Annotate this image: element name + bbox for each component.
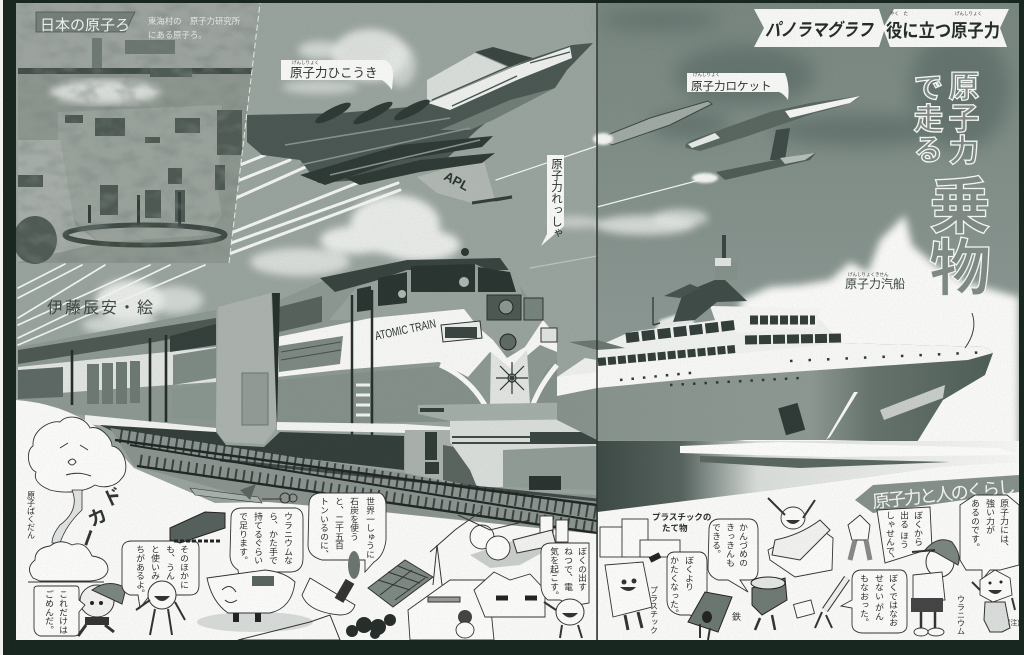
plastic buildings bbox=[600, 519, 680, 557]
hull bbox=[557, 343, 993, 442]
right page edge bbox=[1019, 0, 1024, 655]
bubble: ぼくよりかたくなった: かたくなった。 bbox=[669, 556, 679, 618]
bubble: これだけはごめんだ: これだけは bbox=[58, 590, 68, 634]
bubble: かんづめの: できる。 bbox=[711, 523, 721, 558]
bubble: ぼくの出す: ぼくの出す bbox=[577, 547, 587, 591]
title: 原子力で走る乗物: で走る bbox=[908, 72, 944, 165]
uranium character bbox=[972, 570, 1015, 632]
small plane and train icons bbox=[170, 484, 297, 543]
label: プラスチック: プラスチック bbox=[650, 586, 658, 634]
bubble: これだけはごめんだ bbox=[34, 586, 85, 636]
bubble: 原子力には: 強い力が bbox=[985, 498, 995, 534]
airplane: nuclear plane bbox=[247, 43, 593, 203]
photo title box: 日本の原子ろ: 日本の原子ろ bbox=[40, 17, 130, 34]
bubble: ぼくではなおせない: もなおった。 bbox=[859, 574, 869, 627]
grid-roof building bbox=[368, 560, 433, 607]
bubble: 原子力には: あるのです。 bbox=[970, 499, 980, 552]
bubble: 世界一しゅうに: 世界一しゅうに bbox=[365, 496, 375, 559]
boy in cap running bbox=[78, 583, 126, 636]
atom star emblem bbox=[496, 362, 528, 394]
undercarriage bbox=[100, 425, 404, 470]
right page dark cloud smudges bbox=[600, 10, 1010, 150]
panel: right comic strip white ground bbox=[598, 462, 1019, 640]
rockets: three nuclear rockets bbox=[593, 96, 860, 183]
bubble: そのほかにも: も、うん bbox=[165, 545, 175, 580]
bubble: そのほかにも bbox=[122, 541, 199, 608]
label: 原子力ロケット: げんしりょく bbox=[693, 71, 720, 78]
panel: left page sky bbox=[16, 3, 597, 640]
bulb character right of left page bbox=[544, 599, 584, 638]
man in bed character bbox=[768, 498, 833, 577]
coal pile bbox=[346, 614, 396, 639]
bubble: ぼくではなおせない bbox=[841, 570, 907, 633]
uranium-ship character bbox=[197, 570, 313, 632]
photo panel: Japanese reactor at Tokai-mura bbox=[13, 3, 260, 264]
contrails: white speed lines bbox=[18, 146, 700, 345]
label: 原子力ひこうき: げんしりょく bbox=[292, 59, 319, 66]
bubble: 世界一しゅうに: 石炭を使う bbox=[349, 497, 359, 541]
panel: left comic strip white ground bbox=[16, 400, 597, 640]
airplane tail lettering: APL bbox=[442, 168, 472, 194]
bubble: ウラニウムなら: 持てるぐらい bbox=[253, 511, 263, 565]
railway tracks bbox=[110, 428, 597, 535]
light wing bbox=[427, 53, 507, 102]
bubble: そのほかにも: ちがあるよ。 bbox=[135, 545, 145, 598]
title banner: panorama graph: げんしりょく bbox=[955, 10, 982, 17]
bubble: そのほかにも: と使いみ bbox=[150, 545, 160, 580]
bubble: かんづめの bbox=[708, 519, 758, 592]
left scan border bbox=[3, 0, 16, 655]
locomotive body bbox=[279, 260, 557, 424]
sound effect: ドカーン: ー bbox=[77, 526, 103, 551]
bubble: ぼくよりかたくなった bbox=[667, 552, 707, 622]
boy in helmet bbox=[911, 540, 959, 636]
bubble: ぼくの出す: 気を起こす。 bbox=[549, 546, 559, 600]
bubble: 世界一しゅうに: と、二千五百 bbox=[334, 497, 344, 551]
label: 原子力れっしゃ: 原子力れっしゃ bbox=[550, 158, 563, 238]
label: 原子力ロケット: 原子力ロケット bbox=[691, 80, 772, 93]
title: 原子力で走る乗物: 乗 bbox=[929, 173, 991, 242]
power plant and towers bbox=[430, 512, 568, 585]
label: 原子力汽船: 原子力汽船 bbox=[845, 276, 905, 291]
title: 原子力で走る乗物 bbox=[908, 70, 991, 304]
upper deck bbox=[710, 306, 820, 333]
train: atomic train bbox=[18, 248, 597, 490]
photo caption: 東海村の 原子力研究所 bbox=[148, 16, 241, 26]
photo caption: にある原子ろ。 bbox=[148, 30, 207, 40]
bubble: ウラニウムなら: ウラニウムな bbox=[283, 512, 293, 565]
title banner: panorama graph bbox=[754, 9, 1009, 47]
label: プラスチックのたて物: プラスチックの bbox=[652, 512, 711, 522]
plastic book character bbox=[605, 555, 660, 630]
title banner: panorama graph: 役に立つ原子力 bbox=[886, 21, 1000, 41]
title: 原子力で走る乗物: 物 bbox=[929, 235, 991, 304]
bubble: ぼくから: しゃせんで、 bbox=[885, 511, 895, 564]
title: 原子力で走る乗物: 原子力 bbox=[944, 70, 979, 166]
bubble: ぼくから bbox=[877, 507, 932, 564]
bubble: 世界一しゅうに: トンいるのに、 bbox=[319, 497, 329, 559]
bubble: ウラニウムなら bbox=[230, 508, 303, 585]
title banner: panorama graph: やく た bbox=[890, 10, 908, 17]
bubble: ぼくよりかたくなった: ぼくより bbox=[684, 556, 694, 591]
bubble: 世界一しゅうに bbox=[308, 493, 386, 572]
gangway panel bbox=[216, 293, 280, 444]
bubble: かんづめの: かんづめの bbox=[738, 523, 748, 567]
engine pods bbox=[300, 96, 495, 185]
rear coach bbox=[18, 310, 216, 436]
large white cloud behind ship bbox=[650, 215, 1019, 470]
white scan margin bbox=[0, 0, 3, 655]
sound effect: ドカーン: ド bbox=[100, 485, 126, 512]
rock character bbox=[848, 515, 870, 560]
bubble: ウラニウムなら: で足ります。 bbox=[238, 512, 248, 565]
sound effect: ドカーン: カ bbox=[85, 505, 111, 532]
title banner: panorama graph: パノラマグラフ bbox=[765, 20, 874, 40]
tail bbox=[417, 158, 495, 203]
water under ship bbox=[597, 441, 1019, 512]
uranium bulb character bbox=[136, 581, 185, 635]
coal-ship character bbox=[238, 551, 360, 640]
label: 原子力ひこうき: 原子力ひこうき bbox=[290, 66, 378, 80]
funnel and mast bbox=[673, 279, 747, 322]
bubble: 原子力には: 原子力には、 bbox=[999, 499, 1009, 552]
bubble: ぼくの出す bbox=[541, 543, 589, 606]
banner: 原子力と人のくらし: 原子力と人のくらし bbox=[871, 477, 1017, 512]
photo caption bbox=[148, 16, 241, 40]
label: プラスチックのたて物 bbox=[652, 512, 711, 533]
bubble: ぼくから: 出る ほう bbox=[899, 510, 909, 549]
page fold line bbox=[596, 3, 598, 640]
lower deck bbox=[596, 317, 843, 366]
syringe and suitcase bbox=[793, 578, 847, 628]
locomotive door ladder bbox=[352, 290, 372, 440]
bubble: ぼくの出す: ねつで、電 bbox=[563, 547, 573, 591]
ship: nuclear liner bbox=[557, 235, 993, 442]
train lettering: ATOMIC TRAIN bbox=[374, 316, 437, 343]
clouds: sky clouds on both pages bbox=[82, 29, 708, 335]
bubble: 原子力には bbox=[960, 495, 1019, 580]
windows bbox=[598, 320, 843, 362]
bubble: ぼくではなおせない: せない がん bbox=[874, 574, 884, 620]
bubble: ウラニウムなら: ら、かた手で bbox=[268, 512, 278, 565]
bubble: かんづめの: きっきんも bbox=[725, 523, 735, 567]
locomotive nose skirt bbox=[405, 402, 597, 490]
label: 原子力ひこうき bbox=[281, 59, 393, 90]
label: 原子ばくだん: 原子ばくだん bbox=[26, 491, 36, 539]
iron book character bbox=[688, 592, 732, 640]
fuselage bbox=[247, 43, 593, 183]
note mark: (注) bbox=[1008, 618, 1020, 627]
sound effect: ドカーン bbox=[77, 485, 126, 551]
headlight and grille bbox=[441, 321, 482, 342]
mushroom cloud character bbox=[28, 417, 126, 582]
houses with ceiling lights bbox=[408, 572, 545, 640]
can character bbox=[751, 577, 787, 630]
label: 鉄: 鉄 bbox=[732, 611, 741, 622]
bottom scan border bbox=[0, 640, 1024, 655]
white sill line bbox=[277, 422, 452, 434]
label: 原子力ロケット bbox=[687, 71, 789, 100]
bubble: これだけはごめんだ: ごめんだ。 bbox=[44, 589, 54, 634]
credit: artist name: 伊藤辰安・絵 bbox=[47, 299, 155, 317]
label: 原子力汽船: げんしりょくきせん bbox=[848, 271, 889, 278]
bubble: ぼくから: ぼくから bbox=[913, 511, 923, 546]
bubble: そのほかにも: そのほかに bbox=[179, 545, 189, 589]
rocket flames bbox=[593, 133, 718, 183]
label: 原子力れっしゃ bbox=[541, 155, 564, 246]
label: プラスチックのたて物: たて物 bbox=[662, 523, 688, 533]
top scan border bbox=[0, 0, 1024, 3]
panel: right page sky bbox=[597, 3, 1019, 640]
bubble: ぼくではなおせない: ぼくではなお bbox=[888, 574, 898, 627]
driver and horn bbox=[398, 277, 469, 298]
label: ウラニウム: ウラニウム bbox=[956, 595, 966, 635]
